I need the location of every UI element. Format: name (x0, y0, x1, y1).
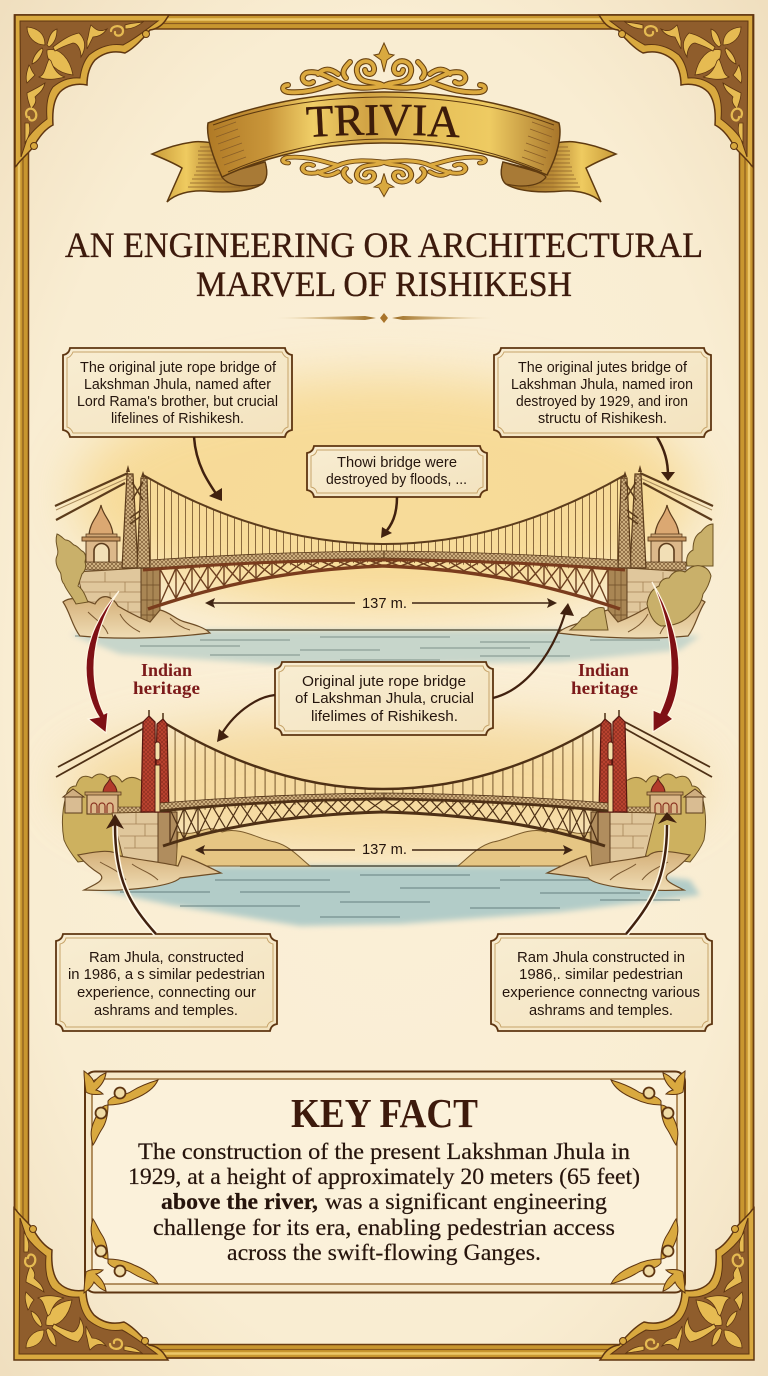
callout: original jute bridge left: lifelines of Rishikesh. (111, 410, 244, 427)
panel: key fact: 1929, at a height of approximately 20 meters (65 feet) (128, 1164, 640, 1189)
callout: Ram Jhula left: in 1986, a s similar pedestrian (68, 966, 265, 983)
title (65, 225, 703, 304)
gold ribbon banner (152, 92, 616, 202)
panel: key fact: challenge for its era, enabling pedestrian access (153, 1215, 615, 1240)
callout: original jutes bridge right: Lakshman Jhula, named iron (511, 376, 693, 393)
label: Indian heritage right (571, 660, 638, 698)
panel: key fact: above the river, (161, 1189, 318, 1214)
arrow: left callout to first bridge (194, 437, 222, 501)
panel: key fact: The construction of the present Lakshman Jhula in (138, 1139, 631, 1164)
arrow: red evolution arrow left (86, 591, 119, 733)
callout: crucial lifelines center: Original jute rope bridge (302, 673, 466, 690)
callout: original jutes bridge right: structu of Rishikesh. (538, 410, 667, 427)
title: AN ENGINEERING OR ARCHITECTURAL (65, 225, 703, 265)
watercolor sky wash (64, 377, 704, 855)
arrow: center callout to second bridge (217, 695, 275, 742)
label: Indian heritage right: heritage (571, 678, 638, 698)
corner ornament: top left (15, 15, 169, 167)
corner ornament: bottom left (14, 1208, 168, 1360)
banner ornament: bottom flourish (283, 157, 485, 197)
panel: key fact (84, 1071, 685, 1293)
banner ornament: top flourish (283, 43, 485, 92)
corner ornament: bottom right (600, 1208, 754, 1360)
panel: key fact: KEY FACT (291, 1090, 478, 1136)
arrow: flood callout to first bridge (381, 497, 397, 538)
callout: crucial lifelines center (275, 662, 493, 735)
label: Indian heritage left: heritage (133, 678, 200, 698)
arrow: red evolution arrow right (652, 582, 679, 732)
callout: Ram Jhula right: 1986,. similar pedestrian (519, 966, 683, 983)
panel: key fact: was a significant engineering (325, 1189, 608, 1214)
water under first bridge (70, 630, 700, 666)
dimension: first bridge span (205, 595, 557, 612)
panel: key fact: across the swift-flowing Ganges. (227, 1240, 541, 1265)
callout: Ram Jhula right: experience connectng various (502, 984, 700, 1001)
foliage: first bridge left trees (56, 534, 88, 604)
callout: Ram Jhula right (491, 934, 712, 1031)
foliage: first bridge right trees (570, 524, 713, 630)
callout: Ram Jhula right: Ram Jhula constructed in (517, 949, 685, 966)
callout: original jute bridge left: Lakshman Jhula, named after (84, 376, 271, 393)
first bridge: Lakshman Jhula (55, 465, 713, 638)
title divider (272, 313, 496, 323)
callout: Ram Jhula left: experience, connecting our (77, 984, 256, 1001)
dimension: second bridge span: 137 m. (362, 841, 407, 858)
dimension: second bridge span (195, 841, 573, 858)
callout: Ram Jhula left (56, 934, 277, 1031)
callout: original jute bridge left: Lord Rama's brother, but crucial (77, 393, 278, 410)
callout: original jute bridge left: The original jute rope bridge of (80, 359, 277, 376)
water under second bridge (90, 866, 700, 926)
callout: original jutes bridge right: destroyed by 1929, and iron (516, 393, 688, 410)
callout: original jutes bridge right: The original jutes bridge of (518, 359, 688, 376)
callout: destroyed by floods: Thowi bridge were (337, 454, 457, 471)
second bridge: Ram Jhula (56, 710, 712, 890)
label: Indian heritage left: Indian (141, 660, 192, 680)
banner label: TRIVIA: TRIVIA (305, 94, 461, 147)
arrow: Ram Jhula right callout to temple (626, 812, 677, 934)
callout: Ram Jhula left: ashrams and temples. (94, 1002, 238, 1019)
arrow: right callout to first bridge (657, 437, 675, 481)
dimension: first bridge span: 137 m. (362, 595, 407, 612)
title: MARVEL OF RISHIKESH (196, 264, 572, 304)
corner ornament: top right (599, 15, 753, 167)
callout: Ram Jhula right: ashrams and temples. (529, 1002, 673, 1019)
callout: destroyed by floods: destroyed by floods, ... (326, 471, 467, 488)
callout: original jutes bridge right (494, 348, 711, 437)
callout: Ram Jhula left: Ram Jhula, constructed (89, 949, 244, 966)
callout: crucial lifelines center: lifelimes of Rishikesh. (311, 708, 458, 725)
callout: original jute bridge left (63, 348, 292, 437)
label: Indian heritage left (133, 660, 200, 698)
label: Indian heritage right: Indian (578, 660, 629, 680)
arrow: center callout up to first bridge (493, 603, 574, 698)
callout: destroyed by floods (307, 446, 487, 497)
callout: crucial lifelines center: of Lakshman Jhula, crucial (295, 690, 474, 707)
arrow: Ram Jhula left callout to temple (106, 814, 156, 934)
